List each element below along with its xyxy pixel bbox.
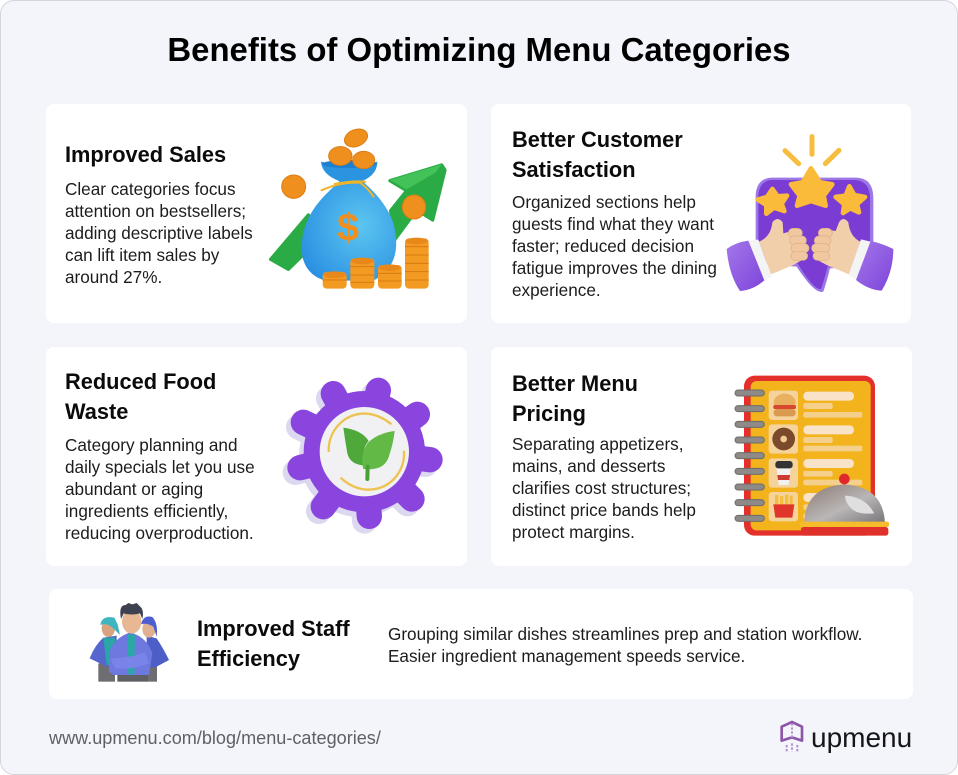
logo icon: book — [780, 720, 804, 752]
text: better menu pricing: protect margins. — [512, 522, 635, 542]
heading: reduced food waste: Waste — [65, 399, 128, 424]
text: reduced food waste: daily specials let you use — [65, 457, 255, 477]
heading: improved sales: Improved Sales — [65, 142, 226, 167]
panel: improved sales — [46, 104, 467, 323]
text: better menu pricing — [512, 434, 696, 542]
text: improved staff efficiency: Easier ingredient management speeds service. — [388, 646, 745, 666]
text: reduced food waste: reducing overproduction. — [65, 523, 254, 543]
icon: thumbs up and stars — [726, 134, 894, 292]
heading: better menu pricing — [512, 371, 638, 426]
panel: improved staff efficiency — [49, 589, 913, 699]
text: improved sales: around 27%. — [65, 267, 162, 287]
dollar sign on bag: $ — [337, 206, 359, 250]
heading: better customer satisfaction: Better Customer — [512, 127, 683, 152]
text: better customer satisfaction: experience. — [512, 280, 601, 300]
text: improved sales: attention on bestsellers; — [65, 201, 246, 221]
text: better menu pricing: Separating appetizers, — [512, 434, 684, 454]
heading: improved staff efficiency: Efficiency — [197, 646, 300, 671]
logo wordmark: upmenu — [811, 722, 912, 753]
panel: reduced food waste — [46, 347, 467, 566]
text: better customer satisfaction: fatigue improves the dining — [512, 258, 717, 278]
heading: better customer satisfaction — [512, 127, 683, 182]
heading: better customer satisfaction: Satisfaction — [512, 157, 636, 182]
icon: gear with leaf — [282, 378, 443, 534]
panel: better customer satisfaction — [491, 104, 911, 323]
text: improved sales: can lift item sales by — [65, 245, 219, 265]
title: Benefits of Optimizing Menu Categories — [167, 31, 791, 68]
text: better menu pricing: mains, and desserts — [512, 456, 665, 476]
text: better customer satisfaction: guests find what they want — [512, 214, 714, 234]
logo: upmenu — [780, 720, 912, 753]
text: improved staff efficiency — [388, 624, 862, 666]
icon: menu book with cloche — [734, 376, 889, 536]
heading: reduced food waste: Reduced Food — [65, 369, 216, 394]
icon: staff team — [90, 603, 169, 682]
text: reduced food waste: Category planning and — [65, 435, 238, 455]
heading: improved staff efficiency — [197, 616, 350, 671]
heading: better menu pricing: Better Menu — [512, 371, 638, 396]
heading: reduced food waste — [65, 369, 216, 424]
text: reduced food waste: abundant or aging — [65, 479, 203, 499]
text: improved sales — [65, 179, 253, 287]
text: better customer satisfaction: Organized sections help — [512, 192, 696, 212]
text: improved sales: Clear categories focus — [65, 179, 236, 199]
heading: better menu pricing: Pricing — [512, 401, 586, 426]
icon: money bag with growth arrow — [269, 128, 447, 289]
text: better customer satisfaction — [512, 192, 717, 300]
source url: www.upmenu.com/blog/menu-categories/ — [49, 728, 381, 748]
text: better menu pricing: clarifies cost structures; — [512, 478, 691, 498]
text: better customer satisfaction: faster; reduced decision — [512, 236, 694, 256]
heading: improved staff efficiency: Improved Staff — [197, 616, 350, 641]
text: improved staff efficiency: Grouping similar dishes streamlines prep and station workflow. — [388, 624, 862, 644]
text: improved sales: adding descriptive labels — [65, 223, 253, 243]
text: reduced food waste — [65, 435, 255, 543]
panel: better menu pricing — [491, 347, 912, 566]
text: reduced food waste: ingredients efficiently, — [65, 501, 228, 521]
text: better menu pricing: distinct price bands help — [512, 500, 696, 520]
